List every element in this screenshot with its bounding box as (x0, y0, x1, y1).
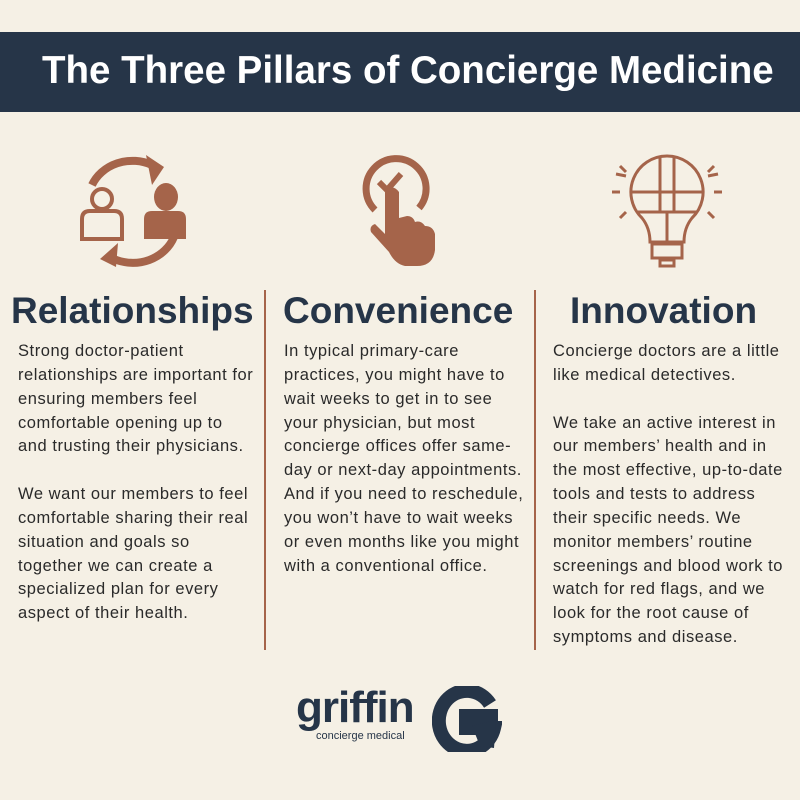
text block: with a conventional office. (284, 557, 488, 575)
text block: Strong doctor-patient (18, 342, 184, 360)
text block: aspect of their health. (18, 604, 188, 622)
text block: our members’ health and in (553, 437, 767, 455)
heading: Convenience (283, 290, 513, 331)
text block: the most effective, up-to-date (553, 461, 783, 479)
column: relationships (11, 290, 254, 622)
text block: And if you need to reschedule, (284, 485, 523, 503)
text block: Concierge doctors are a little (553, 342, 780, 360)
column: innovation (553, 290, 783, 646)
text block: look for the root cause of (553, 604, 749, 622)
text block (553, 342, 783, 646)
heading: Innovation (570, 290, 757, 331)
text block: comfortable sharing their real (18, 509, 248, 527)
text block: and trusting their physicians. (18, 437, 244, 455)
text block: We take an active interest in (553, 414, 776, 432)
text block: like medical detectives. (553, 366, 736, 384)
text block: day or next-day appointments. (284, 461, 522, 479)
text block: In typical primary-care (284, 342, 459, 360)
text block: practices, you might have to (284, 366, 505, 384)
logo (296, 683, 502, 752)
text block (18, 342, 253, 622)
text block: concierge offices offer same- (284, 437, 511, 455)
text block: specialized plan for every (18, 580, 218, 598)
text block: wait weeks to get in to see (284, 390, 492, 408)
header bar (0, 32, 800, 112)
text block: situation and goals so (18, 533, 190, 551)
text block: together we can create a (18, 557, 213, 575)
icon: convenience (362, 155, 435, 266)
title: The Three Pillars of Concierge Medicine (42, 49, 774, 92)
logo wordmark: griffin (296, 683, 414, 732)
text block: your physician, but most (284, 414, 475, 432)
logo tagline: concierge medical (316, 730, 405, 742)
text block: relationships are important for (18, 366, 253, 384)
icon: innovation (612, 154, 722, 268)
divider lines (264, 290, 266, 650)
text block (284, 342, 523, 575)
text block: you won’t have to wait weeks (284, 509, 513, 527)
text block: watch for red flags, and we (553, 580, 765, 598)
text block: symptoms and disease. (553, 628, 738, 646)
icon: relationships (80, 155, 186, 267)
text block: ensuring members feel (18, 390, 197, 408)
text block: We want our members to feel (18, 485, 248, 503)
text block: screenings and blood work to (553, 557, 783, 575)
column: convenience (283, 290, 523, 575)
text block: tools and tests to address (553, 485, 755, 503)
text block: comfortable opening up to (18, 414, 223, 432)
text block: their specific needs. We (553, 509, 741, 527)
text block: or even months like you might (284, 533, 519, 551)
logo mark (432, 686, 502, 752)
text block: monitor members’ routine (553, 533, 753, 551)
heading: Relationships (11, 290, 254, 331)
